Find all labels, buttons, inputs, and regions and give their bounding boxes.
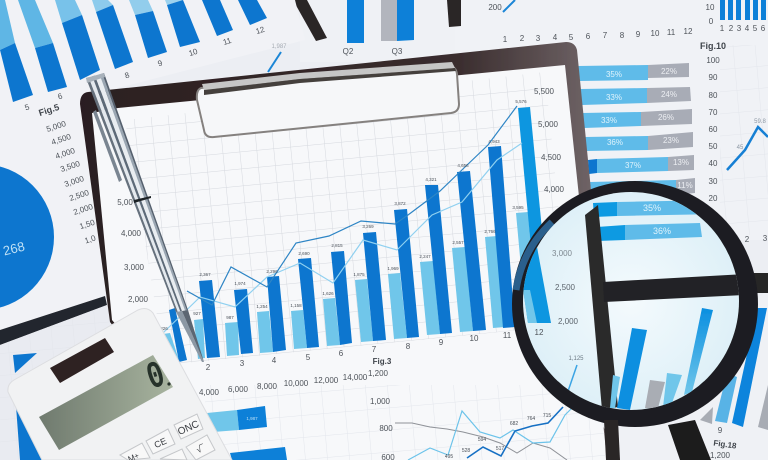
Fig.10 y axis: 30 xyxy=(709,177,718,186)
dark bar values: 5,576 xyxy=(515,99,527,104)
month labels xyxy=(24,25,266,112)
magnified percent labels: 36% xyxy=(653,226,671,236)
y axis labels left: 5,00 xyxy=(117,198,133,207)
month axis labels: 10 xyxy=(651,29,660,38)
percentage values: 33% xyxy=(601,116,617,125)
x axis labels: 5 xyxy=(306,353,311,362)
Fig.5 axis xyxy=(45,119,97,245)
clipboard clip xyxy=(197,62,459,137)
chart grid xyxy=(125,72,570,365)
Fig.10 y axis: 80 xyxy=(709,91,718,100)
lower y axis labels: 800 xyxy=(379,424,393,433)
Fig.10 heading: Fig.10 xyxy=(700,41,726,51)
Fig.10 y axis: 50 xyxy=(709,142,718,151)
y axis labels left: 4,000 xyxy=(121,229,142,238)
Fig.5 axis: 2,000 xyxy=(72,202,95,217)
panel: top-right paper: 3 xyxy=(763,234,768,243)
line fragment with value xyxy=(268,44,287,72)
dark bar values: 3,872 xyxy=(394,201,406,206)
month labels: 11 xyxy=(222,36,233,47)
bottom-right labels: 9 xyxy=(718,426,723,435)
month axis labels: 9 xyxy=(636,30,641,39)
small bar labels: 1 xyxy=(720,24,725,33)
line values: 517 xyxy=(496,446,504,452)
magnified axis labels: 2,000 xyxy=(558,317,579,326)
x axis labels xyxy=(206,328,543,372)
Fig.10 y axis xyxy=(706,56,720,203)
lower x axis labels xyxy=(199,373,368,397)
dark bar values: 2,815 xyxy=(331,243,343,248)
Fig.10 values: 45 xyxy=(737,145,744,151)
light bar values: 2,557 xyxy=(452,240,464,245)
percentage values: 26% xyxy=(658,113,674,122)
light bar values xyxy=(160,205,524,331)
panel: top-right paper xyxy=(455,0,768,244)
lower-left blue bars xyxy=(13,353,37,373)
dark bar values: 2,367 xyxy=(199,272,211,277)
dark bar values: 4,321 xyxy=(425,177,437,182)
light upper bars xyxy=(0,0,183,50)
y axis labels left: 3,000 xyxy=(124,263,145,272)
y axis labels right: 5,000 xyxy=(538,120,559,129)
month labels: 12 xyxy=(255,25,266,36)
light bar values: 2,766 xyxy=(484,229,496,234)
light bar values: 2,247 xyxy=(419,254,431,259)
top-right line fragment xyxy=(503,0,515,12)
Fig.5 axis: 4,000 xyxy=(54,146,77,161)
lower y axis labels: 1,200 xyxy=(368,369,389,378)
lower x axis labels: 6,000 xyxy=(228,385,249,394)
month axis labels: 7 xyxy=(603,31,608,40)
percentage values: 22% xyxy=(661,67,677,76)
x axis labels: 6 xyxy=(339,349,344,358)
lower x axis labels: 10,000 xyxy=(284,379,309,388)
y axis labels right: 5,500 xyxy=(534,87,555,96)
x axis labels: 3 xyxy=(240,359,245,368)
quarter labels xyxy=(343,47,403,56)
magnified axis labels xyxy=(535,249,584,362)
magnified axis labels: 2,500 xyxy=(555,283,576,292)
magnified percent labels: 35% xyxy=(643,203,661,213)
calculator xyxy=(8,309,232,460)
lens xyxy=(523,192,739,410)
panel: top-right paper: 200 xyxy=(488,3,502,12)
light bar values: 1,158 xyxy=(290,303,302,308)
line values: 682 xyxy=(510,421,518,427)
percentage values: 24% xyxy=(661,90,677,99)
pen xyxy=(86,73,204,362)
light bar values: 1,969 xyxy=(387,266,399,271)
month axis labels: 5 xyxy=(569,33,574,42)
M+ key xyxy=(120,443,150,460)
dark divider strips xyxy=(293,0,327,41)
magnified line xyxy=(568,364,578,390)
panel: lower chart on sheet xyxy=(199,369,605,460)
y axis labels left xyxy=(117,198,149,304)
y axis labels right: 4,500 xyxy=(541,153,562,162)
magnified axis labels: 12 xyxy=(535,328,544,337)
month labels: 5 xyxy=(24,102,31,112)
rim highlight xyxy=(516,222,552,290)
Fig.5 axis: 1,50 xyxy=(78,218,96,231)
month axis labels: 3 xyxy=(536,34,541,43)
magnifier rim xyxy=(512,181,758,427)
small bar labels: 3 xyxy=(737,24,742,33)
magnifier handle xyxy=(668,420,711,460)
clip bar top xyxy=(202,62,455,90)
panel: top-middle paper with quarterly bars xyxy=(293,0,461,62)
percentage values xyxy=(601,67,693,190)
Fig.5 heading: Fig.5 xyxy=(37,102,61,118)
panel: lower-left paper xyxy=(0,305,240,460)
pen ring xyxy=(134,196,151,203)
bottom-right labels xyxy=(710,426,738,460)
month axis labels: 2 xyxy=(520,34,525,43)
x axis labels: 7 xyxy=(372,345,377,354)
Fig.10 values: 59.8 xyxy=(754,119,766,125)
Fig.5 axis: 4,500 xyxy=(50,132,73,147)
pen top cap xyxy=(86,73,105,83)
x axis labels: 9 xyxy=(439,338,444,347)
light trend line xyxy=(163,143,522,333)
lower x axis labels: 14,000 xyxy=(343,373,368,382)
lower y axis labels xyxy=(368,369,395,460)
small bar labels: 6 xyxy=(761,24,766,33)
decimal point xyxy=(167,382,171,386)
panel: top-left paper with pie and bars xyxy=(0,0,305,345)
blank key xyxy=(160,449,187,460)
month axis labels xyxy=(503,27,693,44)
magnified stacked bars xyxy=(593,200,702,241)
percentage values: 13% xyxy=(673,158,689,167)
percentage values: 23% xyxy=(663,136,679,145)
Fig.5 axis: 3,000 xyxy=(63,174,86,189)
pen clip xyxy=(93,110,122,182)
light bar values: 927 xyxy=(193,311,201,316)
dark bar values: 2,690 xyxy=(298,251,310,256)
light bar values: 1,875 xyxy=(353,272,365,277)
dark right band xyxy=(745,273,768,293)
month labels: 6 xyxy=(57,91,64,101)
root key: √‾ xyxy=(195,442,207,455)
dark bar values: 2,296 xyxy=(266,269,278,274)
solar panel xyxy=(50,338,114,383)
dark bar values: 3,269 xyxy=(362,224,374,229)
dark bar values: 4,943 xyxy=(488,139,500,144)
panel: main chart sheet xyxy=(92,65,607,460)
Fig.10 line xyxy=(727,127,768,170)
percentage values: 11% xyxy=(677,181,693,190)
month axis labels: 1 xyxy=(503,35,508,44)
month axis labels: 4 xyxy=(553,33,558,42)
month axis labels: 11 xyxy=(667,28,676,37)
dark bar values: 1,974 xyxy=(234,281,246,286)
dark lower band xyxy=(0,296,107,345)
light bar values: 826 xyxy=(160,326,168,331)
light bar values: 1,254 xyxy=(256,304,268,309)
percentage values: 36% xyxy=(607,138,623,147)
line values: 764 xyxy=(527,416,535,422)
small bar labels xyxy=(706,3,766,33)
dark bar values: 4,656 xyxy=(457,163,469,168)
percentage values: 37% xyxy=(625,161,641,170)
Fig.5 axis: 3,500 xyxy=(59,159,82,174)
Fig.10 y axis: 70 xyxy=(709,108,718,117)
x axis labels: 10 xyxy=(470,334,479,343)
small bar labels: 4 xyxy=(745,24,750,33)
clip bar dark strip xyxy=(204,68,456,95)
Fig.10 y axis: 90 xyxy=(709,73,718,82)
magnified bar 12 xyxy=(524,247,551,323)
digit zero: 0 xyxy=(141,353,170,400)
dark blue bars xyxy=(169,107,551,362)
Fig.5 axis: 2,500 xyxy=(68,188,91,203)
Fig.10 y axis: 100 xyxy=(706,56,720,65)
light bar values: 1,626 xyxy=(322,291,334,296)
LCD screen xyxy=(39,355,173,450)
lower x axis labels: 4,000 xyxy=(199,388,220,397)
ON/C key: ONC xyxy=(176,419,201,438)
CE key xyxy=(146,429,175,454)
panel: top-right paper: 2 xyxy=(745,235,750,244)
month axis labels: 6 xyxy=(586,32,591,41)
CE key: CE xyxy=(153,436,168,450)
Fig.5 axis: 1,0 xyxy=(83,233,97,245)
lens contents xyxy=(517,200,745,410)
dark bar values xyxy=(199,99,527,286)
Fig.10 y axis: 20 xyxy=(709,194,718,203)
dark blue bars xyxy=(0,0,267,102)
light blue line xyxy=(408,408,572,460)
Fig.3 heading: Fig.3 xyxy=(373,357,392,366)
magnified axis labels: 3,000 xyxy=(552,249,573,258)
line values: 594 xyxy=(478,437,486,443)
line fragment with value: 1,987 xyxy=(271,44,287,50)
horizontal bar value: 1,987 xyxy=(246,416,258,421)
Fig.10 y axis: 60 xyxy=(709,125,718,134)
light bar values: 987 xyxy=(226,315,234,320)
pen tip xyxy=(176,311,204,362)
lower y axis labels: 1,000 xyxy=(370,397,391,406)
magnified bars xyxy=(610,308,713,410)
magnified axis labels: 1,125 xyxy=(568,356,584,362)
quarter labels: Q2 xyxy=(343,47,354,56)
lower x axis labels: 12,000 xyxy=(314,376,339,385)
light blue bars xyxy=(163,212,537,362)
month labels: 10 xyxy=(188,47,199,58)
small bar chart top right xyxy=(720,0,766,20)
small bar labels: 2 xyxy=(729,24,734,33)
magnifier xyxy=(512,181,758,427)
month axis labels: 12 xyxy=(684,27,693,36)
x axis labels: 4 xyxy=(272,356,277,365)
panel: stacked percentage bars xyxy=(578,63,695,197)
ON/C key xyxy=(174,414,203,439)
dark blue line xyxy=(467,407,563,458)
light bar values: 3,595 xyxy=(512,205,524,210)
bottom-right labels: 1,200 xyxy=(710,451,731,460)
percentage values: 35% xyxy=(606,70,622,79)
small bar labels: 10 xyxy=(706,3,715,12)
x axis labels: 2 xyxy=(206,363,211,372)
x axis labels: 8 xyxy=(406,342,411,351)
dark trend line xyxy=(187,106,517,305)
pie chart xyxy=(0,164,54,310)
pie value: 268 xyxy=(2,239,26,258)
small bar labels: 5 xyxy=(753,24,758,33)
magnified dark clipboard strips xyxy=(585,205,618,410)
lower x axis labels: 8,000 xyxy=(257,382,278,391)
Fig.5 axis: 5,000 xyxy=(45,119,68,134)
month labels: 9 xyxy=(157,58,164,68)
month axis labels: 8 xyxy=(620,31,625,40)
y axis labels right xyxy=(534,87,565,194)
grey line xyxy=(395,423,567,460)
y axis labels right: 4,000 xyxy=(544,185,565,194)
Fig.10 y axis: 40 xyxy=(709,159,718,168)
bottom-right bars xyxy=(700,308,768,430)
line values xyxy=(445,413,551,460)
clipboard board xyxy=(80,42,620,460)
Fig.10 values xyxy=(737,119,766,151)
small bar labels: 0 xyxy=(709,17,714,26)
line values: 528 xyxy=(462,448,470,454)
root key xyxy=(186,435,215,460)
line values: 495 xyxy=(445,454,453,460)
bottom-right labels: Fig.18 xyxy=(713,438,738,451)
y axis labels left: 2,000 xyxy=(128,295,149,304)
quarter labels: Q3 xyxy=(392,47,403,56)
percentage values: 33% xyxy=(606,93,622,102)
x axis labels: 12 xyxy=(534,328,543,337)
line values: 715 xyxy=(543,413,551,419)
quarterly bars xyxy=(347,0,414,43)
horizontal bars xyxy=(207,406,287,460)
clipboard lower right strip xyxy=(604,420,620,460)
x axis labels: 11 xyxy=(503,331,512,340)
month labels: 8 xyxy=(124,70,131,80)
magnified percent labels xyxy=(643,204,671,234)
panel: bottom-right paper xyxy=(600,273,768,460)
